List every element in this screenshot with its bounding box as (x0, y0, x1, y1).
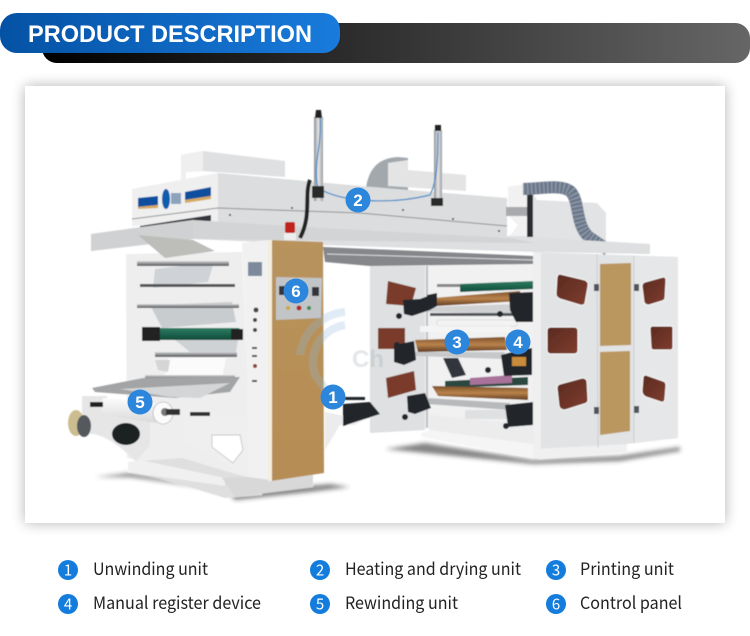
upper dryer: shroud (181, 151, 285, 180)
small rivets (229, 207, 500, 232)
control panel (276, 277, 322, 320)
marker 4 (506, 330, 530, 354)
unwinding bracket (325, 397, 380, 450)
printing unit front frame (533, 252, 678, 459)
rewinding frame (68, 235, 313, 498)
panel shadow (25, 86, 725, 523)
lower station (445, 377, 528, 388)
hinges (594, 284, 639, 414)
blue title pill (0, 13, 340, 53)
tower light (285, 222, 295, 233)
legend (58, 555, 682, 614)
title: PRODUCT DESCRIPTION (28, 21, 312, 48)
legend item 5: Rewinding unit (345, 589, 459, 614)
upper dryer: body (132, 173, 507, 240)
gold side column (242, 222, 324, 481)
legend item 6: Control panel (580, 589, 682, 614)
legend item 4: 4 (64, 594, 72, 614)
cylinders and air lines (300, 110, 443, 238)
black roller mounts (394, 284, 533, 429)
logo watermark (300, 312, 384, 395)
equipment box and exhaust duct (506, 184, 608, 250)
marker 2: 2 (353, 191, 363, 210)
rear brown windows (386, 281, 416, 306)
marker 1 (320, 384, 346, 410)
legend item 1: 1 (64, 560, 72, 580)
brand stripes and logo (138, 196, 158, 207)
machine illustration (68, 110, 680, 500)
legend item 3 (546, 555, 675, 580)
image panel (25, 86, 725, 523)
rear frame of the printing unit (370, 264, 535, 458)
rewind roll (101, 398, 160, 423)
legend item 3: Printing unit (580, 555, 675, 580)
marker 4: 4 (513, 333, 523, 352)
arm (443, 358, 466, 378)
front brown windows (547, 274, 673, 410)
marker 6: 6 (291, 282, 301, 301)
floor shadows (95, 443, 680, 500)
legend item 6: 6 (552, 594, 560, 614)
drying fan and rear box (366, 157, 466, 191)
middle station (415, 337, 507, 352)
marker 3: 3 (452, 333, 462, 352)
legend item 4: Manual register device (93, 589, 261, 614)
upper station (460, 281, 533, 292)
print stations (394, 281, 533, 429)
legend item 3: 3 (552, 560, 560, 580)
logo watermark: Ch (352, 346, 384, 373)
motor (112, 423, 140, 445)
marker 6 (284, 278, 308, 304)
dark header band (42, 23, 750, 63)
marker 5 (128, 390, 152, 414)
marker 3 (444, 330, 470, 354)
marker 5: 5 (135, 393, 145, 412)
marker 2 (346, 188, 370, 212)
legend item 5: 5 (316, 594, 324, 614)
main table plate (91, 220, 650, 266)
legend item 2: Heating and drying unit (345, 555, 522, 580)
header bar (0, 13, 750, 63)
lower frame (82, 396, 150, 462)
marker 1: 1 (328, 388, 338, 407)
webs and rollers (153, 262, 214, 288)
door seams (597, 254, 634, 448)
legend item 1: Unwinding unit (93, 555, 209, 580)
switches (252, 308, 258, 382)
legend item 2: 2 (316, 560, 324, 580)
gold doors (600, 263, 631, 346)
guide wheel (68, 410, 84, 436)
